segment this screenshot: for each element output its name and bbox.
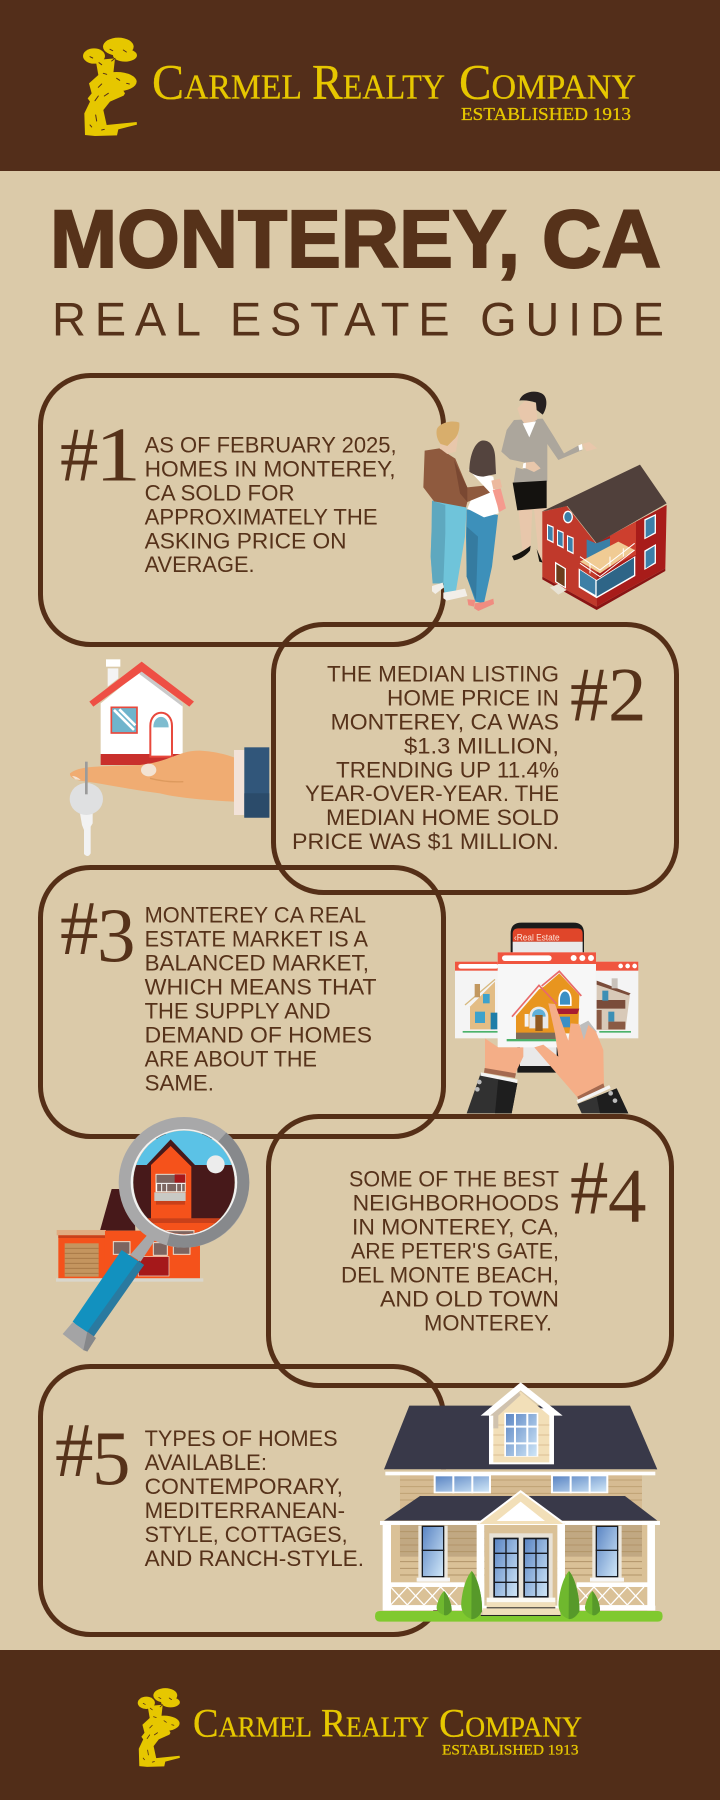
lawn <box>375 1611 663 1622</box>
text 3: ARE ABOUT THE <box>145 1046 317 1071</box>
footer wordmark: REALTY <box>321 1701 429 1746</box>
logo wordmark: ESTABLISHED 1913 <box>461 104 631 124</box>
magnifier lens view <box>133 1130 235 1234</box>
illustration: large two-storey house <box>375 1382 663 1622</box>
number 3 <box>60 885 136 978</box>
text 4: MONTEREY. <box>424 1311 552 1336</box>
left listing card <box>455 962 498 1038</box>
number 1 <box>60 412 141 498</box>
porch columns <box>383 1525 655 1610</box>
illustration: hand holding a house and key <box>70 659 269 856</box>
text 4: ARE PETER'S GATE, <box>351 1239 559 1264</box>
footer tree icon <box>138 1688 180 1767</box>
siding walls <box>391 1474 648 1583</box>
text 4: NEIGHBORHOODS <box>353 1191 559 1216</box>
text 1 <box>145 433 397 577</box>
text 1: AVERAGE. <box>145 552 255 577</box>
text 3: MONTEREY CA REAL <box>145 902 366 927</box>
footer wordmark: CARMEL <box>193 1701 312 1746</box>
number 4: # <box>570 1144 608 1230</box>
number 2: # <box>570 652 608 738</box>
number 3: # <box>60 885 98 971</box>
text 4: DEL MONTE BEACH, <box>341 1263 559 1288</box>
logo wordmark: CARMEL <box>152 54 302 110</box>
center listing card <box>498 952 596 1047</box>
text 5: MEDITERRANEAN- <box>145 1498 345 1523</box>
header logo <box>83 38 636 136</box>
panel outline 4 <box>268 1116 672 1386</box>
text 5: AND RANCH-STYLE. <box>145 1546 364 1571</box>
text 2: PRICE WAS $1 MILLION. <box>292 829 559 854</box>
text 2: TRENDING UP 11.4% <box>336 757 559 782</box>
orange house <box>56 1189 203 1282</box>
logo wordmark <box>152 54 636 124</box>
magnifier handle <box>63 1230 158 1352</box>
text 2: MEDIAN HOME SOLD <box>326 805 559 830</box>
lattice panels <box>391 1582 648 1606</box>
woman <box>466 441 506 611</box>
text 4: SOME OF THE BEST <box>349 1167 559 1192</box>
panel outline 2 <box>274 624 676 892</box>
panel outline 1 <box>40 376 444 644</box>
text 3: DEMAND OF HOMES <box>145 1022 372 1047</box>
text 3: BALANCED MARKET, <box>145 950 369 975</box>
text 4 <box>341 1167 559 1336</box>
text 2: HOME PRICE IN <box>387 686 559 711</box>
phone: ‹Real Estate <box>514 933 560 943</box>
footer wordmark <box>193 1701 582 1758</box>
subtitle: REAL ESTATE GUIDE <box>52 292 664 346</box>
text 2: MONTEREY, CA WAS <box>331 710 559 734</box>
number 4: 4 <box>608 1153 646 1239</box>
porch roof <box>380 1490 660 1525</box>
illustration: agent showing couple a house <box>423 392 667 611</box>
right listing card <box>596 962 638 1038</box>
text 2: THE MEDIAN LISTING <box>327 662 559 687</box>
text 1: APPROXIMATELY THE <box>145 504 378 529</box>
text 1: CA SOLD FOR <box>145 480 295 506</box>
text 5: AVAILABLE: <box>145 1450 267 1475</box>
small house <box>89 659 194 765</box>
number 5 <box>55 1407 130 1501</box>
logo tree icon <box>83 38 137 136</box>
red isometric house <box>542 465 667 610</box>
text 1: ASKING PRICE ON <box>145 528 347 553</box>
logo wordmark: COMPANY <box>459 54 636 110</box>
phone <box>511 923 584 1073</box>
header band <box>0 0 720 171</box>
text 3: WHICH MEANS THAT <box>145 974 377 999</box>
text 3: THE SUPPLY AND <box>145 998 331 1023</box>
text 3 <box>145 902 377 1095</box>
agent <box>501 392 597 563</box>
number 2: 2 <box>608 652 646 738</box>
panel outline 3 <box>40 868 444 1136</box>
upper roof <box>384 1406 657 1469</box>
magnifier ring <box>125 1123 243 1242</box>
number 3: 3 <box>97 892 136 978</box>
footer wordmark: COMPANY <box>439 1701 582 1746</box>
roof eave strip <box>385 1469 655 1472</box>
number 5: 5 <box>92 1415 130 1501</box>
dormer <box>481 1382 563 1464</box>
text 5: CONTEMPORARY, <box>145 1474 343 1499</box>
porch lower front with door and windows <box>417 1525 624 1600</box>
text 3: SAME. <box>145 1070 214 1095</box>
illustration: real estate phone app with listing cards <box>455 923 638 1113</box>
text 2: YEAR-OVER-YEAR. THE <box>305 781 559 806</box>
footer wordmark: ESTABLISHED 1913 <box>442 1742 578 1758</box>
left hand and sleeve <box>467 1038 523 1113</box>
number 1: 1 <box>95 412 141 498</box>
illustration: magnifying glass over an orange house <box>56 1123 243 1352</box>
front steps <box>481 1598 561 1616</box>
right pointing hand and sleeve <box>534 1003 628 1113</box>
title: MONTEREY, <box>50 194 520 285</box>
open hand <box>70 747 269 818</box>
text 4: IN MONTEREY, CA, <box>352 1215 559 1240</box>
text 3: ESTATE MARKET IS A <box>145 926 368 951</box>
roof trim and upper windows <box>385 1472 655 1493</box>
number 4 <box>570 1144 646 1239</box>
shrubs <box>437 1571 600 1619</box>
number 5: # <box>55 1407 94 1493</box>
panel outline 5 <box>40 1366 444 1634</box>
number 1: # <box>60 412 98 498</box>
footer logo <box>138 1688 582 1767</box>
text 5 <box>145 1426 364 1571</box>
text 5: TYPES OF HOMES <box>145 1426 338 1451</box>
text 2 <box>292 662 559 854</box>
logo wordmark: REALTY <box>312 54 445 110</box>
text 5: STYLE, COTTAGES, <box>145 1522 348 1547</box>
title: CA <box>542 194 661 285</box>
footer band <box>0 1650 720 1800</box>
text 1: HOMES IN MONTEREY, <box>145 457 396 482</box>
key <box>70 762 103 856</box>
man <box>423 421 492 601</box>
text 2: $1.3 MILLION, <box>404 733 559 758</box>
text 1: AS OF FEBRUARY 2025, <box>145 433 397 458</box>
number 2 <box>570 652 646 738</box>
text 4: AND OLD TOWN <box>380 1287 559 1312</box>
